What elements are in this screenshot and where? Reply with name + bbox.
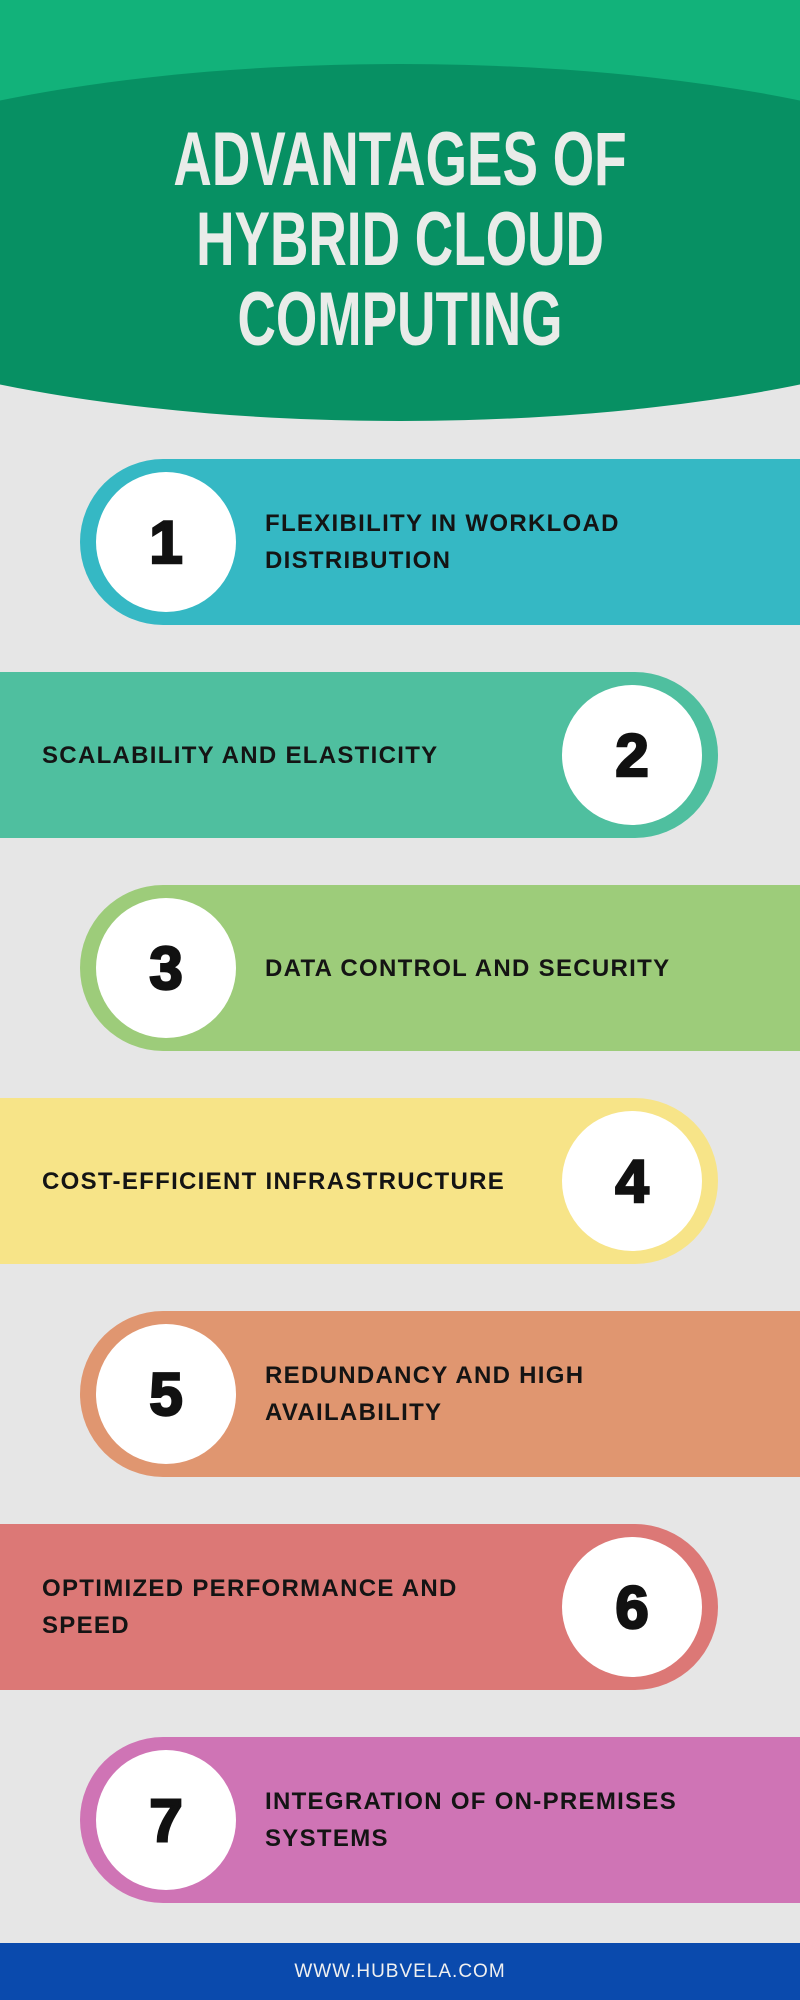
text 6: SPEED xyxy=(42,1612,130,1639)
number 3 xyxy=(96,898,236,1038)
item 7 xyxy=(80,1737,800,1903)
item 6 xyxy=(0,1524,718,1690)
item 4 xyxy=(0,1098,718,1264)
number 5: 5 xyxy=(149,1360,183,1428)
number 5 xyxy=(96,1324,236,1464)
header ellipse xyxy=(0,64,800,421)
text 6 xyxy=(42,1575,458,1639)
number 1 xyxy=(96,472,236,612)
text 7 xyxy=(265,1788,677,1852)
number 4: 4 xyxy=(615,1148,649,1214)
text 6: OPTIMIZED PERFORMANCE AND xyxy=(42,1575,458,1602)
number 7 xyxy=(96,1750,236,1890)
text 5: REDUNDANCY AND HIGH xyxy=(265,1362,584,1389)
header background band xyxy=(0,0,800,330)
item 3 xyxy=(80,885,800,1051)
number 2: 2 xyxy=(615,722,649,788)
item 5 xyxy=(80,1311,800,1477)
footer: WWW.HUBVELA.COM xyxy=(294,1960,506,1982)
text 2: SCALABILITY AND ELASTICITY xyxy=(42,742,438,768)
text 1: FLEXIBILITY IN WORKLOAD xyxy=(265,510,620,537)
number 7: 7 xyxy=(149,1786,183,1854)
text 1: DISTRIBUTION xyxy=(265,547,451,574)
text 1 xyxy=(265,510,620,574)
footer xyxy=(0,1943,800,2000)
text 3: DATA CONTROL AND SECURITY xyxy=(265,954,670,982)
number 3: 3 xyxy=(149,934,183,1002)
item 2 xyxy=(0,672,718,838)
number 1: 1 xyxy=(149,508,183,576)
text 7: INTEGRATION OF ON-PREMISES xyxy=(265,1788,677,1815)
text 5 xyxy=(265,1362,584,1426)
text 7: SYSTEMS xyxy=(265,1825,389,1852)
text 5: AVAILABILITY xyxy=(265,1399,442,1426)
title: ADVANTAGES OF xyxy=(173,117,627,202)
title xyxy=(173,117,627,362)
number 4 xyxy=(562,1111,702,1251)
number 2 xyxy=(562,685,702,825)
text 4: COST-EFFICIENT INFRASTRUCTURE xyxy=(42,1168,505,1194)
item 1 xyxy=(80,459,800,625)
number 6: 6 xyxy=(615,1574,649,1640)
number 6 xyxy=(562,1537,702,1677)
title: HYBRID CLOUD xyxy=(196,197,604,282)
title: COMPUTING xyxy=(237,277,563,362)
